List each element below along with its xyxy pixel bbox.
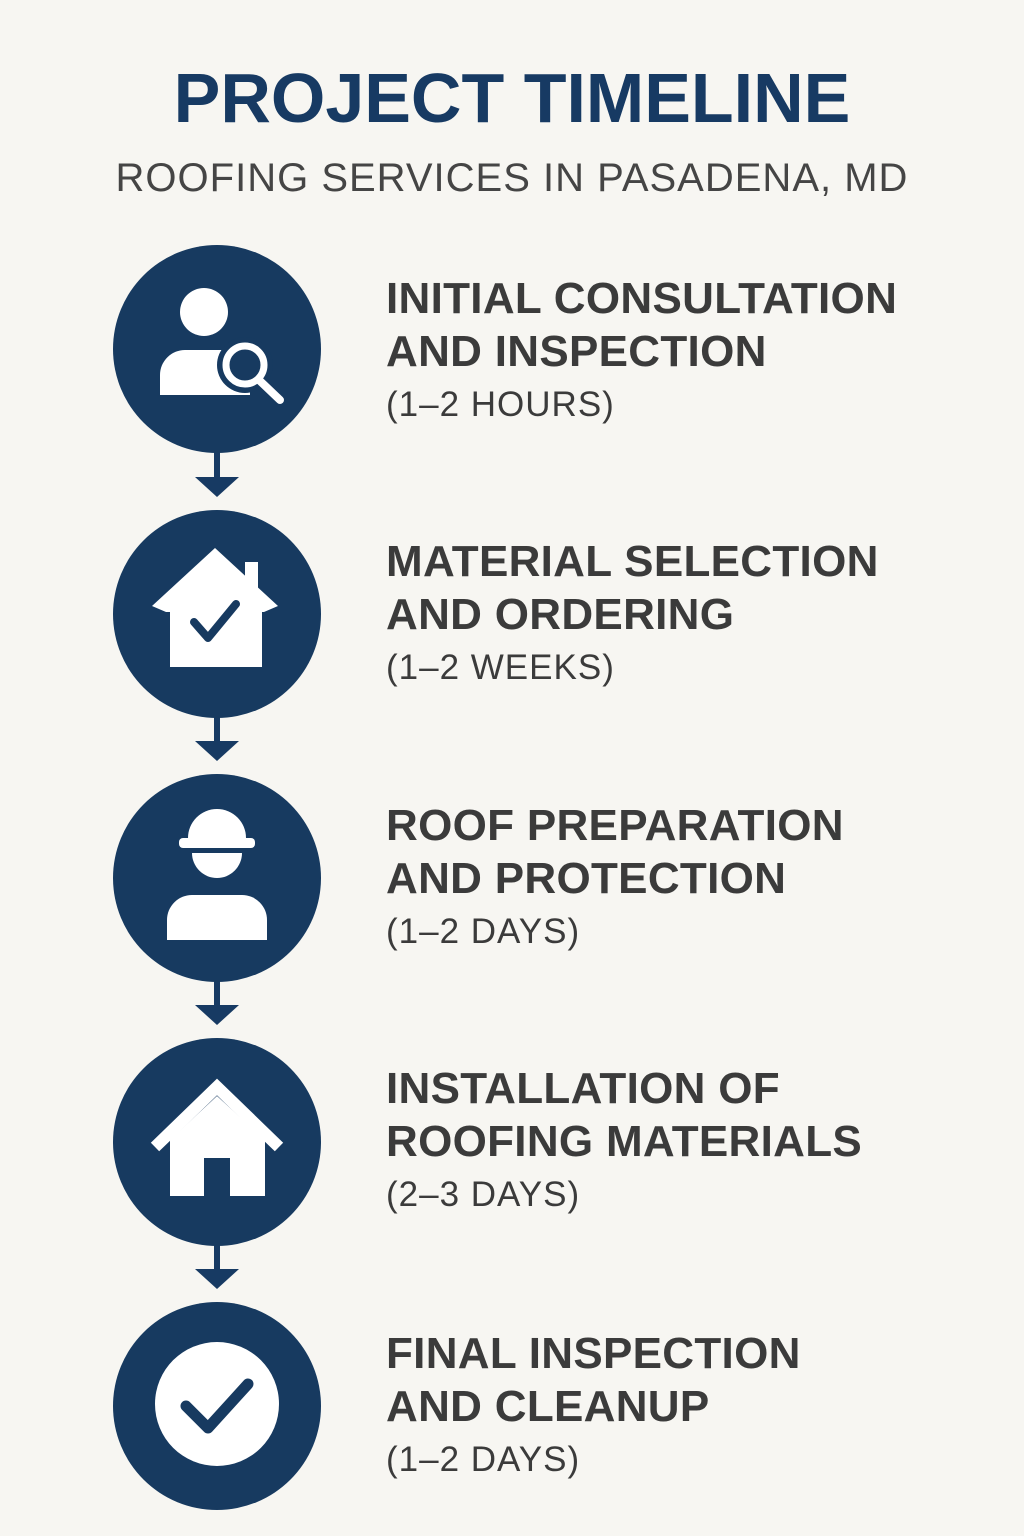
step 3 text [386,801,844,951]
step 1 text: AND INSPECTION [386,327,767,376]
step 2 text: (1–2 WEEKS) [386,648,615,687]
step 4 text: INSTALLATION OF [386,1064,780,1113]
step 2 text: AND ORDERING [386,590,734,639]
step 4 text: ROOFING MATERIALS [386,1117,862,1166]
step 3 icon: worker [113,774,321,982]
step 5 text [386,1329,801,1479]
step 1 text [386,274,897,424]
step 5 text: AND CLEANUP [386,1382,710,1431]
step 5 text: FINAL INSPECTION [386,1329,801,1378]
step 5 icon: check circle [113,1302,321,1510]
step 1 text: INITIAL CONSULTATION [386,274,897,323]
step 3 text: AND PROTECTION [386,854,786,903]
step 2 icon: house with check [113,510,321,718]
step 2 text [386,537,879,687]
step 5 text: (1–2 DAYS) [386,1440,580,1479]
step 4 text [386,1064,862,1214]
step 2 text: MATERIAL SELECTION [386,537,879,586]
title: PROJECT TIMELINE [174,59,850,137]
step 3 text: (1–2 DAYS) [386,912,580,951]
subtitle: ROOFING SERVICES IN PASADENA, MD [116,156,908,200]
step 4 icon: house [113,1038,321,1246]
step 1 text: (1–2 HOURS) [386,385,615,424]
step 4 text: (2–3 DAYS) [386,1175,580,1214]
arrows [195,440,239,1289]
step 1 icon: person with magnifier [113,245,321,453]
step 3 text: ROOF PREPARATION [386,801,844,850]
